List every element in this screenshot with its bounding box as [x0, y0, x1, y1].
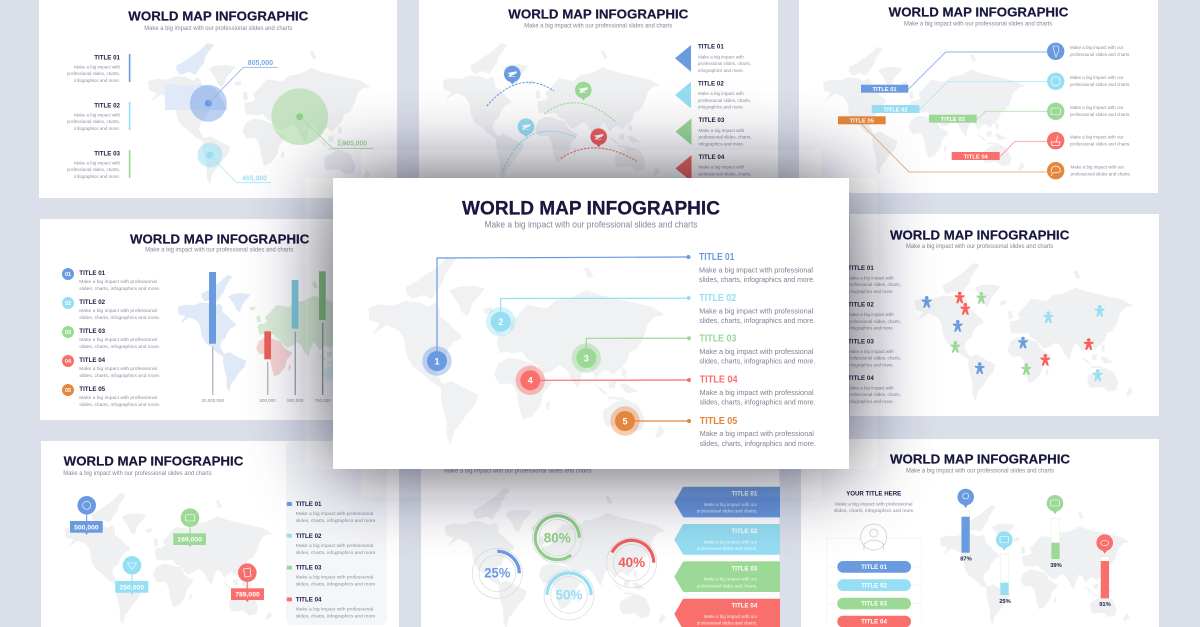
icon row 5: Make a big impact with our — [1070, 164, 1125, 170]
list item 02 — [62, 297, 160, 321]
list item 04: TITLE 04 — [296, 596, 322, 603]
list item 02: infographics and more. — [848, 326, 894, 331]
list item 01 — [287, 501, 376, 524]
label: title 03 — [929, 115, 977, 123]
list item 01: Make a big impact with professional — [296, 511, 373, 517]
pin: green plane — [575, 82, 592, 100]
list item 05: slides, charts, infographics and more. — [79, 402, 160, 408]
sidebar heading: slides, charts, infographics and more — [834, 508, 914, 514]
arrow card: title 04: TITLE 04 — [732, 603, 758, 610]
subheading: Make a big impact with our professional slides and charts — [145, 247, 294, 254]
text block: title 02: Make a big impact with professional — [699, 306, 814, 315]
bubble: 805,000: 805,000 — [248, 58, 273, 67]
bar: 800,000 — [287, 280, 304, 403]
side panel — [286, 441, 387, 625]
pill: title 04: TITLE 04 — [861, 619, 887, 626]
list item: title 01: infographics and more. — [698, 68, 744, 73]
list item 01: infographics and more. — [848, 289, 894, 294]
bubble: 465,000 — [198, 142, 271, 183]
list item 04: TITLE 04 — [79, 357, 106, 364]
legend: title 03: professional slides, charts, — [67, 167, 120, 172]
arrow card: title 03: TITLE 03 — [732, 565, 758, 572]
progress: 87% — [957, 489, 974, 563]
ring: 25%: 25% — [484, 566, 510, 581]
heading: WORLD MAP INFOGRAPHIC — [890, 227, 1070, 242]
list item 04 — [62, 355, 160, 379]
icon row 3 — [1047, 103, 1131, 120]
list item 01: slides, charts, infographics and more — [296, 518, 376, 524]
subheading: Make a big impact with our professional slides and charts — [444, 468, 592, 475]
list item 03 — [848, 338, 901, 367]
list item 03: TITLE 03 — [79, 328, 106, 335]
flight arcs — [487, 82, 637, 170]
icon row 1 — [1047, 43, 1131, 60]
list item 04: Make a big impact with professional — [79, 366, 157, 372]
legend: title 01: infographics and more. — [74, 78, 120, 83]
pill: title 01: TITLE 01 — [861, 564, 887, 571]
world map — [65, 493, 272, 625]
text block: title 01: TITLE 01 — [699, 252, 735, 263]
legend: title 01: professional slides, charts, — [67, 71, 120, 76]
bar: 750,000 — [315, 271, 331, 403]
panel: flight arcs — [419, 0, 778, 200]
callout 2: light blue: 2 — [498, 317, 503, 327]
legend: title 03: Make a big impact with — [74, 160, 120, 166]
callout 5: orange — [610, 406, 691, 436]
list item 04: 04 — [65, 359, 72, 365]
legend: title 01: Make a big impact with — [74, 64, 120, 70]
list item 01 — [848, 265, 901, 294]
list item 02: slides, charts, infographics and more — [296, 550, 376, 556]
ring: 80% — [532, 513, 582, 563]
list item 04: slides, charts, infographics and more — [296, 613, 376, 619]
panel: connector labels — [799, 0, 1158, 193]
heading: WORLD MAP INFOGRAPHIC — [508, 6, 689, 21]
arrow card: title 02: TITLE 02 — [732, 528, 758, 535]
arrow card: title 01: TITLE 01 — [732, 491, 758, 498]
list item 02: Make a big impact with — [848, 312, 894, 317]
text block: title 04 — [700, 375, 816, 407]
list item 02: TITLE 02 — [79, 299, 106, 306]
world map — [915, 263, 1133, 401]
list item 05 — [62, 384, 160, 408]
list item 01: TITLE 01 — [848, 265, 874, 272]
text block: title 02: slides, charts, infographics and more. — [699, 316, 815, 325]
person markers — [922, 292, 1105, 381]
pin: 500,000 — [70, 496, 103, 535]
bubble: 805,000 — [190, 58, 278, 122]
connector frame — [827, 538, 922, 621]
text block: title 03: TITLE 03 — [699, 334, 737, 345]
label: title 05 — [838, 116, 886, 125]
arrow card: title 04: professional slides and charts. — [697, 621, 757, 626]
arrow card: title 04: Make a big impact with our — [704, 614, 758, 619]
list item 02: slides, charts, infographics and more. — [79, 315, 160, 321]
legend: title 02: infographics and more. — [74, 126, 120, 131]
legend: title 02: TITLE 02 — [94, 103, 121, 110]
icon row 3: Make a big impact with our — [1070, 105, 1124, 110]
list item: title 04: TITLE 04 — [698, 154, 725, 161]
list item: title 02: TITLE 02 — [698, 80, 724, 87]
subheading: Make a big impact with our professional slides and charts — [484, 219, 698, 229]
progress: 39% — [1047, 495, 1063, 569]
list item 03: Make a big impact with professional — [79, 337, 157, 343]
sidebar heading: Make a big impact with professional — [835, 502, 912, 508]
bar: 500,000: 500,000 — [260, 398, 276, 403]
centre panel shadow — [333, 178, 849, 469]
text block: title 01: slides, charts, infographics and more. — [699, 275, 815, 284]
list item 01: TITLE 01 — [79, 270, 106, 277]
list item: title 03 — [676, 117, 752, 146]
legend: title 02: Make a big impact with — [74, 112, 120, 118]
text block: title 05: Make a big impact with professional — [700, 429, 814, 438]
icon row 5 — [1047, 162, 1131, 179]
icon row 4 — [1047, 132, 1131, 149]
list item 02: professional slides, charts, — [848, 319, 901, 324]
icon row 4: Make a big impact with our — [1070, 134, 1124, 140]
callout 4: red — [516, 366, 691, 395]
panel: percentage rings — [421, 441, 780, 627]
bubble: 1,905,000: 1,905,000 — [337, 139, 367, 148]
list item 02: TITLE 02 — [848, 302, 874, 309]
callout 2: light blue — [486, 296, 691, 336]
list item 02: TITLE 02 — [296, 533, 322, 540]
list item 03: Make a big impact with — [848, 349, 894, 354]
arrow card: title 03: professional slides and charts. — [697, 583, 757, 588]
list item: title 04: professional slides, charts, — [698, 171, 752, 176]
list item 01: Make a big impact with professional — [79, 279, 157, 285]
list item 03: Make a big impact with professional — [296, 575, 373, 581]
pill: title 02 — [837, 579, 911, 591]
icon row 4: professional slides and charts. — [1070, 142, 1131, 146]
pin: 169,000: 169,000 — [177, 537, 202, 544]
label: title 05: TITLE 05 — [850, 119, 875, 125]
label: title 01: TITLE 01 — [873, 87, 897, 93]
ring: 50%: 50% — [556, 587, 582, 602]
pill: title 03: TITLE 03 — [861, 601, 887, 608]
list item 02: Make a big impact with professional — [79, 308, 157, 314]
list item 03: TITLE 03 — [848, 338, 874, 345]
progress: 25% — [996, 531, 1013, 605]
list item: title 01: Make a big impact with — [698, 54, 744, 60]
legend: title 02: professional slides, charts, — [67, 119, 120, 124]
text block: title 01: Make a big impact with professional — [699, 265, 813, 274]
arrow card: title 03: Make a big impact with our — [704, 577, 758, 582]
list item 01 — [62, 268, 160, 292]
legend: title 03: TITLE 03 — [94, 151, 121, 158]
subheading: Make a big impact with our professional slides and charts — [906, 243, 1054, 250]
list item 02 — [287, 533, 376, 556]
callout 4: red: 4 — [528, 376, 533, 386]
pin: 250,000: 250,000 — [120, 584, 144, 591]
list item: title 04 — [676, 154, 752, 182]
list item 04 — [287, 596, 376, 619]
callout 3: green — [572, 336, 691, 373]
heading: WORLD MAP INFOGRAPHIC — [64, 453, 244, 468]
list item 04 — [848, 375, 901, 404]
text block: title 02: TITLE 02 — [699, 293, 737, 304]
text block: title 03: Make a big impact with professional — [699, 347, 814, 356]
text block: title 03: slides, charts, infographics and more. — [699, 357, 815, 366]
subheading: Make a big impact with our professional slides and charts — [906, 467, 1055, 474]
panel: progress bars — [801, 439, 1159, 627]
list item 04: Make a big impact with — [848, 386, 894, 390]
heading: WORLD MAP INFOGRAPHIC — [890, 451, 1071, 466]
bar: 750,000: 750,000 — [315, 398, 331, 403]
icon row 2: professional slides and charts. — [1070, 82, 1131, 87]
list item: title 04: Make a big impact with — [698, 165, 745, 170]
list item 03: slides, charts, infographics and more. — [79, 344, 160, 350]
list item 03 — [287, 565, 376, 588]
bar: 800,000: 800,000 — [287, 398, 304, 403]
ring: 40% — [607, 538, 657, 588]
text block: title 04: Make a big impact with professional — [700, 388, 814, 397]
legend: title 01 — [67, 54, 130, 83]
list item: title 03: Make a big impact with — [698, 128, 745, 133]
arrow card: title 02: Make a big impact with our — [704, 539, 758, 544]
progress: 25%: 25% — [999, 599, 1011, 605]
pin: 500,000: 500,000 — [74, 524, 99, 531]
list item 03: slides, charts, infographics and more — [296, 582, 376, 588]
pill: title 04 — [837, 616, 911, 627]
label: title 02: TITLE 02 — [883, 107, 908, 113]
panel: people on map — [848, 214, 1159, 416]
list item: title 02 — [675, 80, 751, 110]
icon row 3: professional slides and charts. — [1070, 112, 1131, 117]
list item 01: slides, charts, infographics and more. — [79, 286, 160, 292]
list item 05: Make a big impact with professional — [79, 395, 157, 401]
world map — [148, 43, 370, 184]
list item: title 02: professional slides, charts, — [698, 98, 751, 103]
world map — [445, 488, 666, 627]
label: title 01 — [861, 85, 908, 93]
list item 04: slides, charts, infographics and more. — [79, 373, 160, 379]
list item: title 01 — [675, 44, 751, 73]
list item: title 01: professional slides, charts, — [698, 61, 751, 66]
ring: 50% — [544, 570, 594, 620]
pin: 169,000 — [173, 508, 206, 547]
icon row 2 — [1047, 73, 1131, 90]
arrow card: title 02 — [674, 524, 780, 555]
heading: WORLD MAP INFOGRAPHIC — [462, 198, 720, 219]
legend: title 02 — [67, 102, 130, 131]
callout 1: blue — [422, 255, 690, 376]
arrow card: title 03 — [674, 561, 780, 592]
list item 02 — [848, 302, 901, 331]
legend: title 03 — [67, 150, 130, 179]
ring: 40%: 40% — [618, 555, 645, 570]
pin: blue plane — [504, 66, 521, 84]
list item 01: TITLE 01 — [296, 501, 322, 508]
arrow card: title 01: Make a big impact with our — [704, 502, 758, 507]
subheading: Make a big impact with our professional slides and charts — [524, 22, 673, 30]
list item 03: professional slides, charts, — [848, 356, 901, 361]
list item 03: 03 — [65, 330, 71, 336]
bar: 20,000,000: 20,000,000 — [202, 398, 225, 403]
list item 05: 05 — [65, 388, 71, 394]
icon: user in cycle — [861, 524, 887, 550]
legend: title 03: infographics and more. — [74, 174, 120, 179]
progress: 87%: 87% — [960, 557, 972, 563]
text block: title 02 — [699, 293, 815, 325]
coloured world map — [178, 275, 362, 392]
pin: 250,000 — [115, 556, 148, 595]
icon row 2: Make a big impact with our — [1070, 75, 1124, 80]
list item: title 03: TITLE 03 — [698, 117, 725, 124]
pill: title 01 — [837, 561, 911, 573]
text block: title 05: TITLE 05 — [700, 416, 738, 427]
world map — [443, 43, 660, 181]
list item: title 01: TITLE 01 — [698, 44, 724, 51]
connector lines — [862, 52, 1047, 172]
pill: title 02: TITLE 02 — [861, 582, 887, 589]
list item 04: infographics and more. — [848, 399, 894, 404]
sidebar heading: YOUR TITLE HERE — [846, 491, 902, 498]
arrow card: title 02: professional slides and charts. — [697, 546, 757, 551]
list item 03: TITLE 03 — [296, 565, 322, 572]
list item 02: 02 — [65, 301, 71, 307]
arrow card: title 01: professional slides and charts. — [697, 509, 757, 514]
text block: title 05: slides, charts, infographics and more. — [700, 439, 816, 448]
bubble: 465,000: 465,000 — [242, 174, 267, 183]
callout 5: orange: 5 — [622, 416, 628, 426]
panel: bars on coloured map — [40, 219, 362, 420]
label: title 02 — [872, 105, 919, 113]
callout 1: blue: 1 — [434, 356, 440, 366]
text block: title 04: slides, charts, infographics and more. — [700, 398, 816, 407]
heading: WORLD MAP INFOGRAPHIC — [130, 231, 310, 246]
list item 01: 01 — [65, 272, 71, 278]
text block: title 04: TITLE 04 — [700, 375, 738, 386]
label: title 04: TITLE 04 — [964, 154, 989, 160]
panel: value pins — [41, 441, 399, 627]
icon row 5: professional slides and charts. — [1070, 172, 1131, 176]
progress: 39%: 39% — [1050, 563, 1062, 569]
label: title 04 — [952, 152, 1000, 160]
panel: main slide — [333, 178, 849, 469]
progress: 91% — [1096, 534, 1113, 608]
text block: title 01 — [699, 252, 815, 284]
list item: title 03: professional slides, charts, — [698, 135, 752, 140]
list item 01: professional slides, charts, — [848, 282, 901, 287]
text block: title 05 — [700, 416, 816, 448]
list item 05: TITLE 05 — [79, 386, 106, 393]
list item: title 02: Make a big impact with — [698, 91, 744, 96]
pin: light blue plane — [518, 118, 534, 137]
bubble: 1,905,000 — [271, 88, 373, 148]
world map — [823, 47, 1025, 175]
ring: 25% — [472, 548, 522, 598]
arrow card: title 04 — [674, 599, 780, 627]
list item 04: professional slides, charts, — [848, 392, 901, 397]
subheading: Make a big impact with our professional slides and charts — [904, 20, 1053, 28]
list item 03 — [62, 326, 160, 350]
subheading: Make a big impact with our professional slides and charts — [63, 470, 212, 477]
arrow card: title 01 — [674, 487, 780, 517]
world map — [368, 257, 665, 445]
pin: 789,000: 789,000 — [235, 592, 260, 599]
pill: title 03 — [837, 598, 911, 609]
heading: WORLD MAP INFOGRAPHIC — [128, 9, 309, 24]
pin: red plane — [590, 128, 607, 147]
list item 04: Make a big impact with professional — [296, 606, 373, 612]
heading: WORLD MAP INFOGRAPHIC — [889, 5, 1069, 20]
ring: 80%: 80% — [544, 530, 571, 545]
list item 03: infographics and more. — [848, 362, 894, 367]
legend: title 01: TITLE 01 — [94, 55, 121, 62]
callout 3: green: 3 — [584, 353, 589, 363]
panel: circle sizes on map — [39, 0, 397, 198]
list item: title 02: infographics and more. — [698, 105, 744, 110]
list item: title 03: infographics and more. — [698, 141, 744, 146]
list item 01: Make a big impact with — [848, 276, 894, 280]
list item 04: TITLE 04 — [848, 375, 874, 382]
list item 02: Make a big impact with professional — [296, 543, 373, 549]
text block: title 03 — [699, 334, 815, 366]
world map — [940, 505, 1130, 625]
sidebar heading — [834, 491, 914, 514]
bar: 500,000 — [260, 331, 276, 403]
pin: 789,000 — [231, 563, 264, 602]
bar: 20,000,000 — [202, 272, 225, 403]
progress: 91%: 91% — [1099, 602, 1111, 608]
label: title 03: TITLE 03 — [941, 117, 966, 123]
icon row 1: Make a big impact with our — [1070, 45, 1124, 50]
icon row 1: professional slides and charts. — [1070, 52, 1131, 57]
subheading: Make a big impact with our professional slides and charts — [144, 25, 293, 32]
